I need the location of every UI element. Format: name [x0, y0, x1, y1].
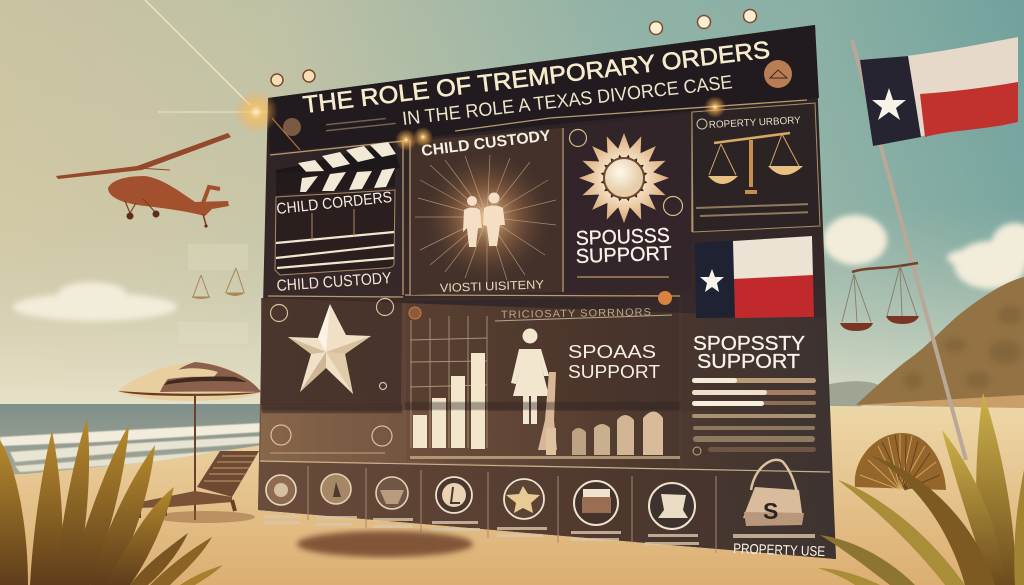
board shadow on sand	[297, 531, 473, 557]
icon: beach chair	[135, 451, 259, 523]
title: THE ROLE OF TREMPORARY ORDERS	[302, 36, 771, 119]
icon: badge 2	[321, 474, 351, 504]
panel: spouss support	[564, 113, 691, 292]
header: title band	[268, 25, 819, 153]
badges	[270, 298, 394, 446]
header badge	[764, 60, 792, 88]
panel: property urbory	[692, 103, 820, 232]
panel: bottom icon row	[260, 460, 830, 559]
floating note left	[178, 244, 248, 344]
label: spoaas support: SPOAAS	[568, 341, 656, 362]
icon: bronze scales on beach	[840, 263, 919, 331]
label: child custody heading: CHILD CUSTODY	[420, 127, 552, 160]
panel: spouss support: SUPPORT	[575, 243, 672, 268]
icon: woman figure	[511, 328, 557, 450]
panel: spoposty support	[692, 333, 816, 455]
background: sky	[0, 0, 1024, 410]
list bars	[692, 378, 816, 455]
icon: Texas flag on board	[695, 236, 814, 318]
icon: badge 4	[436, 477, 472, 513]
label: property use: PROPERTY USE	[733, 540, 825, 559]
foreground: palm plant right	[818, 393, 1024, 585]
icon: sun emblem	[579, 133, 669, 223]
icon: large star	[288, 304, 371, 394]
label: spoposty support: SPOPSSTY	[693, 333, 805, 355]
spotlights along the top	[271, 10, 756, 86]
label: child custody: CHILD CUSTODY	[276, 270, 392, 295]
background: clouds	[13, 215, 1024, 321]
background: sand	[0, 406, 1024, 585]
icon: badge 3	[376, 477, 408, 509]
sun glare ray	[145, 0, 290, 112]
panel: temporary support chart	[405, 291, 680, 470]
lens glare	[234, 90, 726, 151]
bar chart	[410, 316, 487, 449]
icon: helicopter	[56, 133, 231, 228]
panel: spoposty support: SUPPORT	[697, 351, 800, 373]
icon: dry bush	[855, 433, 946, 490]
icon: small bars	[546, 412, 663, 455]
label: child corders: CHILD CORDERS	[276, 189, 393, 218]
label: temporary sorrnors: TRICIOSATY SORRNORS	[501, 306, 652, 321]
icon: clapperboard	[275, 142, 400, 275]
icon: badge 1	[266, 475, 296, 505]
icon: money bag	[743, 460, 804, 526]
subtitle: IN THE ROLE A TEXAS DIVORCE CASE	[401, 72, 733, 130]
icon: beach umbrella	[118, 362, 261, 520]
panel: main board	[258, 25, 836, 559]
label: property urbory: ROPERTY URBORY	[709, 115, 801, 131]
icon: Texas flag on pole	[852, 37, 1018, 460]
panel dividers	[268, 100, 807, 297]
foreground: palm plant left	[0, 418, 223, 585]
panel: child custody	[411, 127, 562, 295]
background: distant hill	[826, 381, 878, 408]
icon: money bag: S	[763, 498, 778, 524]
icon: badge 6 house	[574, 481, 618, 525]
background: hill	[856, 277, 1024, 408]
background: sea	[0, 404, 270, 474]
label: spouss support: SPOUSSS	[575, 225, 670, 250]
icon: floating scales	[192, 268, 244, 298]
panel: temporary support chart: SUPPORT	[568, 361, 660, 382]
icon: badge 7 hat	[649, 483, 695, 529]
label: visitation: VIOSTI UISITENY	[440, 277, 544, 295]
icon: justice scales	[708, 133, 803, 192]
panel: child orders clapperboard	[275, 142, 400, 295]
panel: star	[262, 298, 402, 454]
caption lines	[264, 515, 815, 545]
icon: radiant couple	[415, 149, 556, 285]
badges	[570, 130, 682, 216]
icon: badge 5 star	[504, 479, 544, 519]
